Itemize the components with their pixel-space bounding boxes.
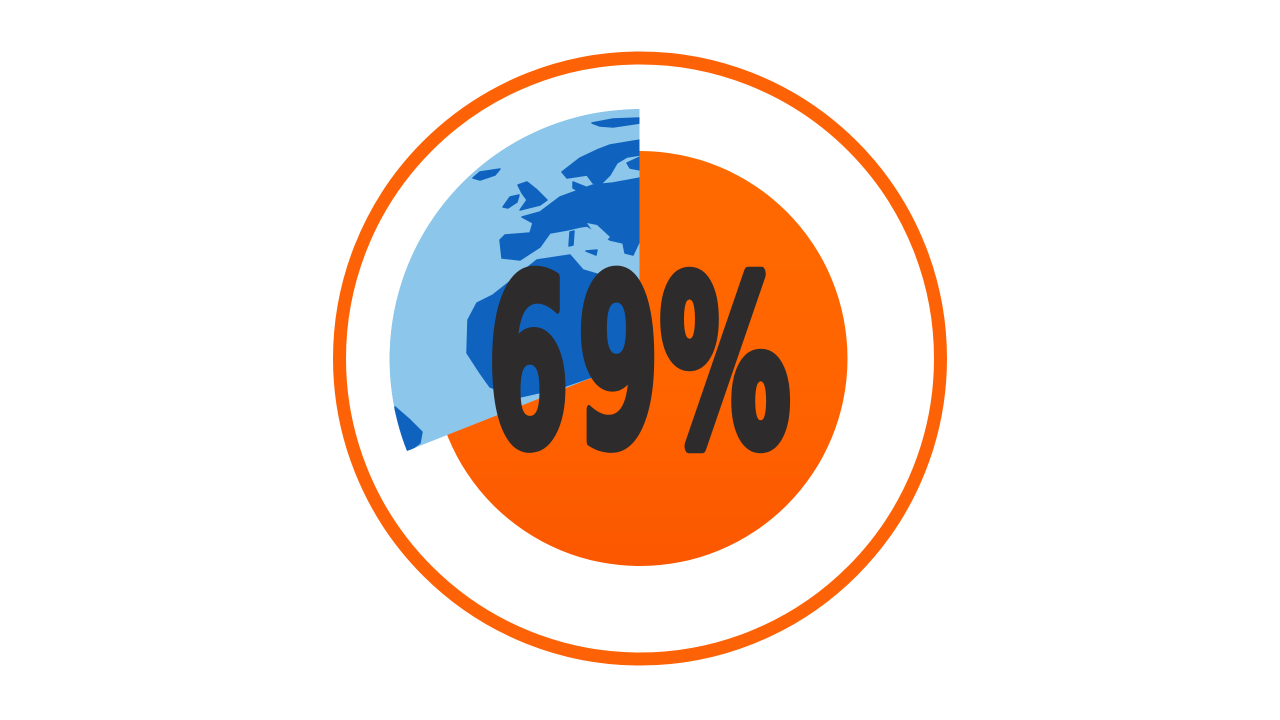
- map: land masses: [390, 118, 640, 452]
- digit 6: 6: [487, 228, 570, 502]
- orange pie circle: [432, 151, 848, 566]
- percent sign: %: [660, 232, 790, 497]
- outer orange ring: [340, 58, 940, 659]
- Adriatic sea: [587, 223, 610, 241]
- blue world map wedge: [389, 109, 640, 452]
- digit 9: 9: [577, 228, 660, 502]
- headline figure 69%: [487, 228, 790, 502]
